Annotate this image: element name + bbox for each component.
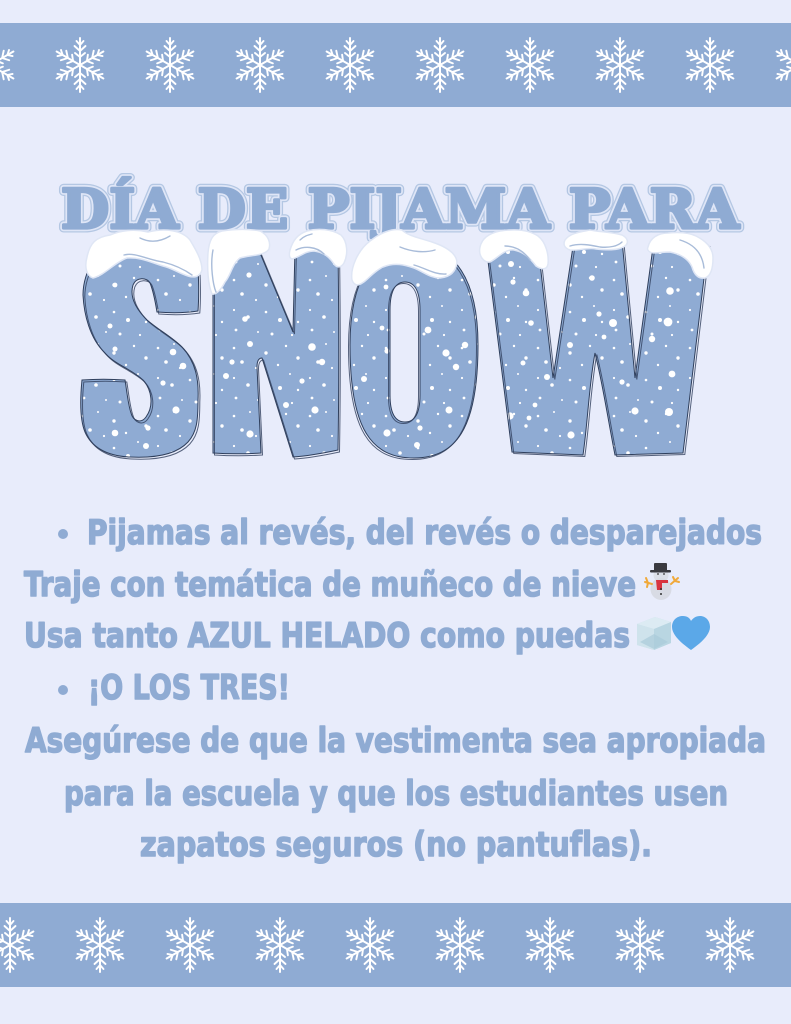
icon: blue heart	[672, 616, 710, 650]
icon: snowman	[645, 563, 679, 600]
bottom snowflake banner	[0, 903, 791, 987]
snow caps	[86, 229, 713, 294]
top snowflake banner	[0, 23, 791, 107]
title: Día de pijama para: DÍA DE PIJAMA PARA	[61, 177, 740, 241]
letter fills	[81, 240, 708, 458]
snow cap shading	[124, 234, 704, 292]
centered note line 3: zapatos seguros (no pantuflas).	[140, 825, 652, 865]
snow dots	[82, 250, 700, 456]
title: Día de pijama para: DÍA DE PIJAMA PARA	[61, 177, 740, 241]
bullet 2	[58, 685, 68, 695]
body text	[24, 513, 766, 865]
icon: ice cube	[637, 617, 671, 650]
line: all three: ¡O LOS TRES!	[88, 668, 290, 708]
title: Día de pijama para: DÍA DE PIJAMA PARA	[61, 177, 740, 241]
line: snowman costume: Traje con temática de muñeco de nieve	[24, 565, 636, 605]
bullet 1	[58, 529, 68, 539]
letter outlines	[81, 240, 710, 460]
line: icy blue: Usa tanto AZUL HELADO como puedas	[24, 616, 630, 656]
snowy word: SNOW	[70, 229, 720, 465]
